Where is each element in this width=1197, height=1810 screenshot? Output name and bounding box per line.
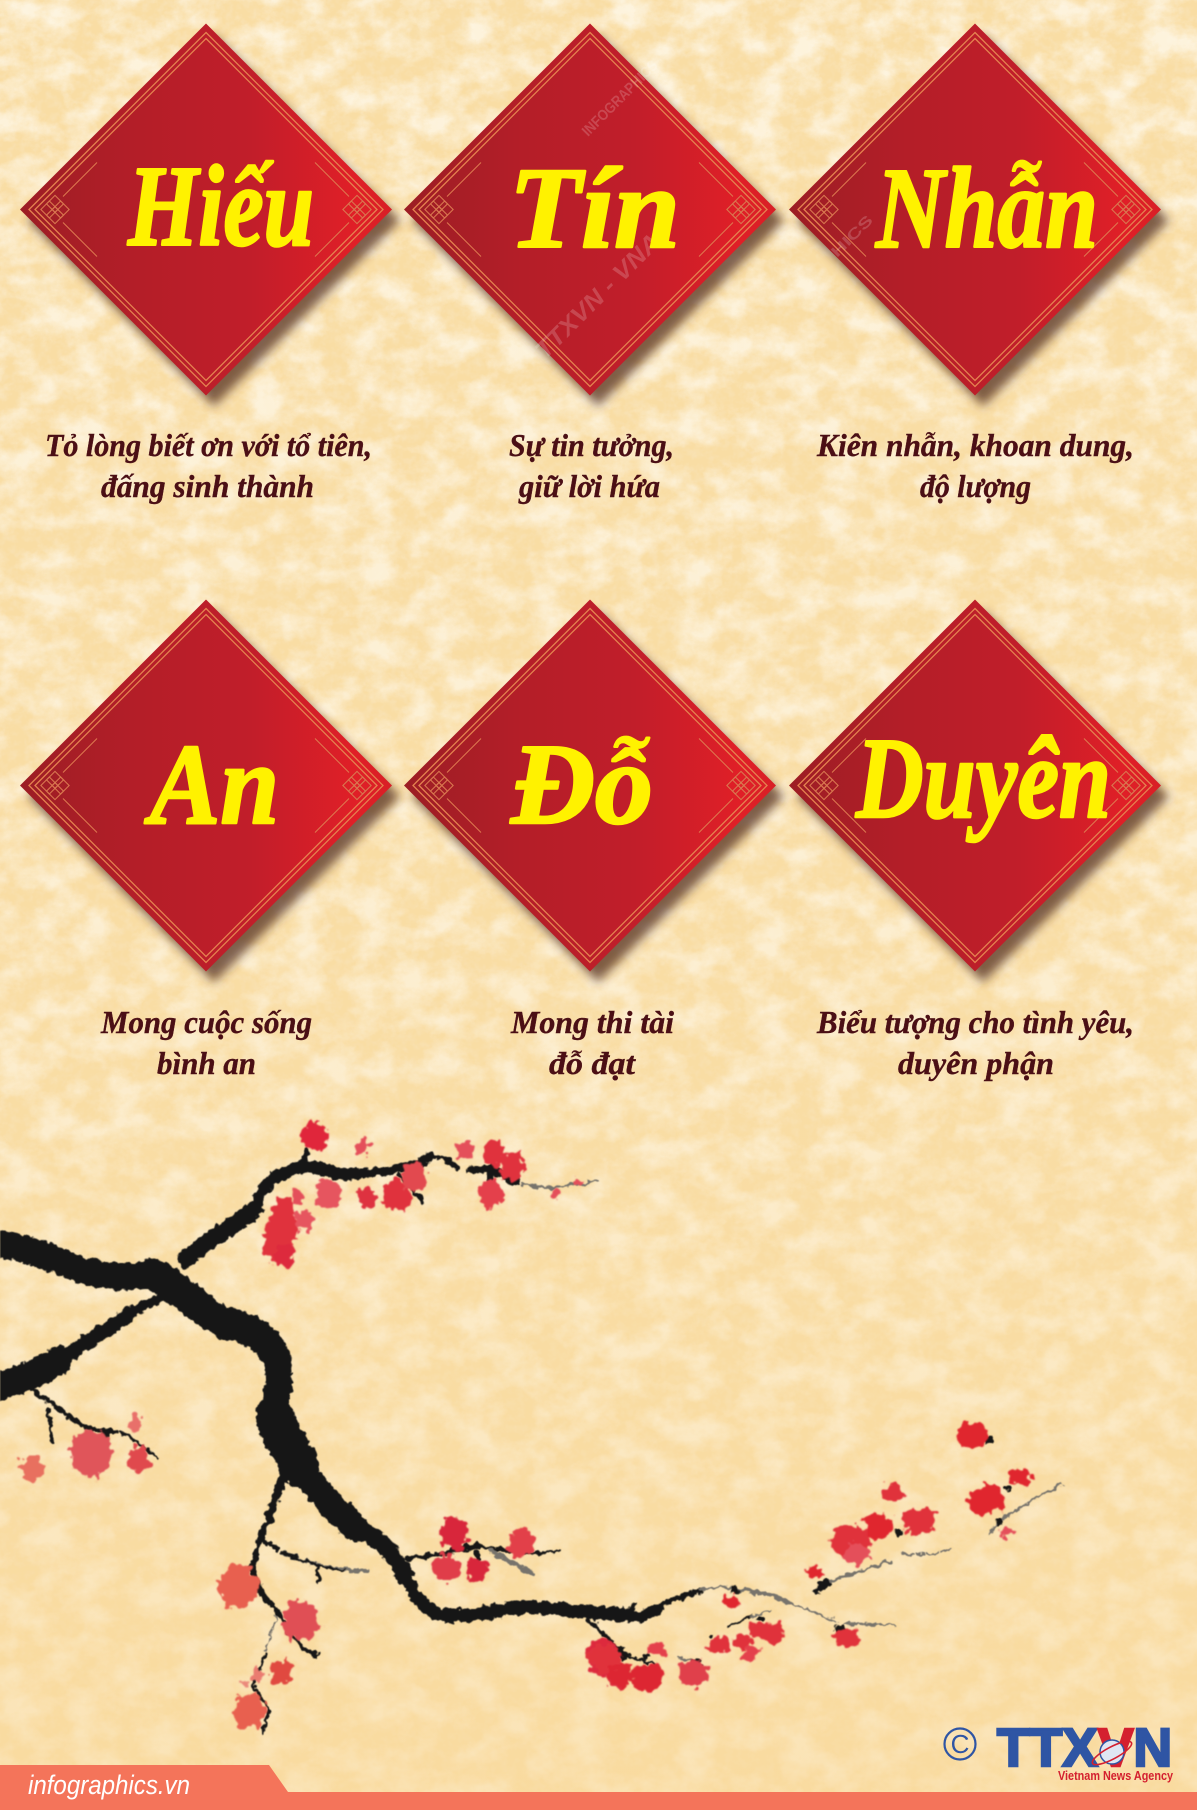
panel: An xyxy=(20,600,400,1081)
description: Duyên: Biểu tượng cho tình yêu, xyxy=(816,1004,1134,1040)
panel: Đỗ xyxy=(404,600,784,1081)
description: Hiếu: đấng sinh thành xyxy=(101,468,314,504)
red diamond: Đỗ xyxy=(404,600,784,982)
description: Tín: giữ lời hứa xyxy=(518,468,660,504)
blossom branch illustration xyxy=(0,1124,1061,1732)
description: An: Mong cuộc sống xyxy=(100,1004,312,1040)
copyright symbol xyxy=(944,1728,976,1760)
heading: Nhẫn: Nhẫn xyxy=(874,145,1098,273)
description: Nhẫn: Kiên nhẫn, khoan dung, xyxy=(816,427,1134,463)
description: Hiếu: Tỏ lòng biết ơn với tổ tiên, xyxy=(45,427,372,463)
description: Đỗ: Mong thi tài xyxy=(510,1004,674,1040)
panel: Hiếu xyxy=(20,24,400,504)
panel: Tín xyxy=(404,24,784,504)
red diamond: Hiếu xyxy=(20,24,400,406)
description: Tín: Sự tin tưởng, xyxy=(509,427,674,463)
description: Duyên: duyên phận xyxy=(898,1045,1054,1081)
globe emblem xyxy=(1090,1737,1134,1769)
description: Nhẫn: độ lượng xyxy=(920,468,1031,504)
logo: TTXVN xyxy=(944,1718,1174,1783)
watermark: infographics: INFOGRAPHICS xyxy=(579,57,662,140)
red plum blossoms xyxy=(22,1124,1030,1728)
heading: Tín: Tín xyxy=(509,145,680,273)
red diamond: Nhẫn xyxy=(789,24,1169,406)
heading: An: An xyxy=(145,721,279,849)
heading: Đỗ: Đỗ xyxy=(510,721,653,849)
description: Đỗ: đỗ đạt xyxy=(549,1045,636,1081)
copyright symbol: C xyxy=(951,1729,969,1759)
red diamond: Duyên xyxy=(789,600,1169,982)
ink branches xyxy=(0,1151,1061,1732)
watermark: TTXVN - VNA: TTXVN - VNA xyxy=(530,228,666,364)
panel: Duyên xyxy=(789,600,1169,1081)
footer text: infographics.vn: infographics.vn xyxy=(28,1770,190,1800)
wordmark: TTXVN xyxy=(997,1718,1172,1778)
footer bar xyxy=(0,1765,1197,1810)
red diamond: Tín xyxy=(404,24,784,406)
watermark: HICS: HICS xyxy=(828,212,877,261)
red diamond: An xyxy=(20,600,400,982)
heading: Duyên: Duyên xyxy=(855,715,1111,843)
tagline: Vietnam News Agency xyxy=(1058,1768,1174,1783)
description: An: bình an xyxy=(157,1045,256,1081)
panel: Nhẫn xyxy=(789,24,1169,504)
heading: Hiếu: Hiếu xyxy=(127,143,314,271)
